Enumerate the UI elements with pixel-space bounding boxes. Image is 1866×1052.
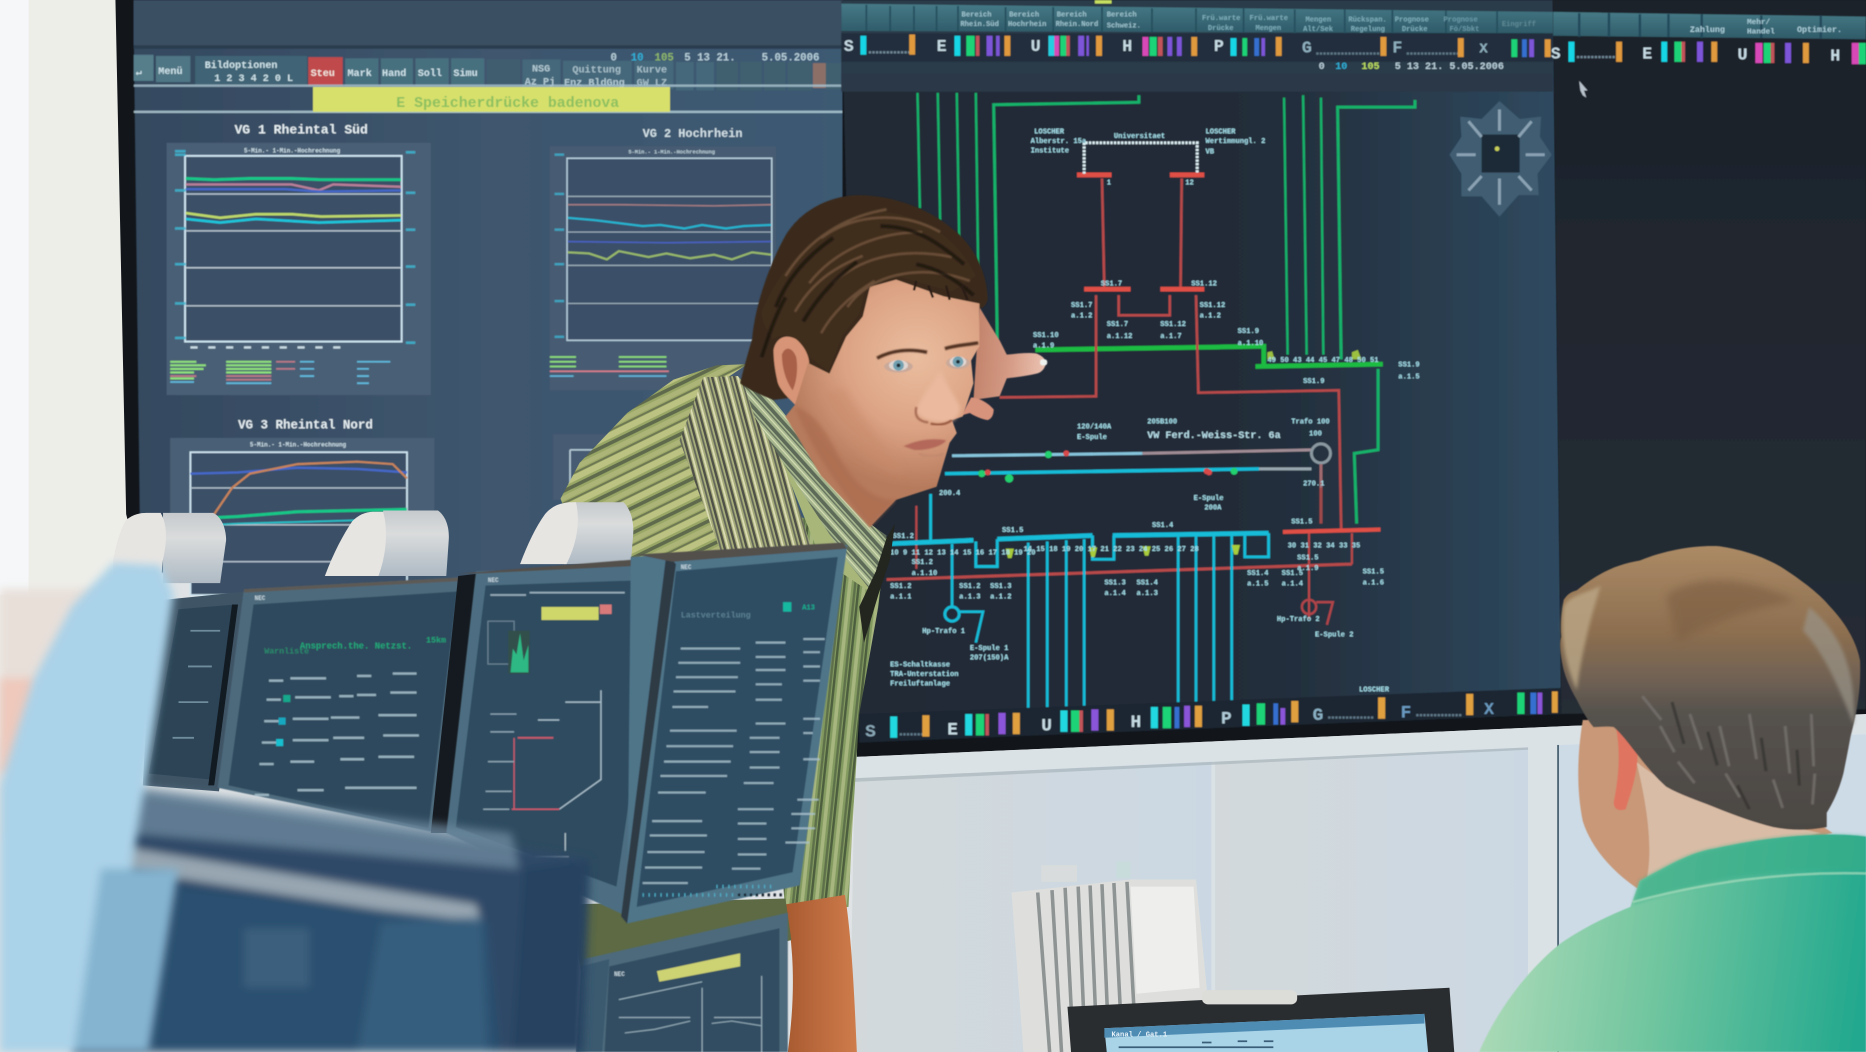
monitor: alarm list	[218, 577, 467, 833]
green polo shirt	[1479, 834, 1866, 1052]
pointing hand	[962, 307, 1047, 420]
diagram labels: Freiluftanlage	[890, 680, 950, 688]
diagram labels: Alberstr. 15a	[1031, 138, 1087, 146]
toolbar: left screen: Bildoptionen	[205, 60, 278, 72]
toolbar: center screen: Prognose	[1444, 16, 1478, 24]
toolbar: center screen: Eingriff	[1502, 21, 1536, 29]
toolbar: center screen: Mengen	[1305, 16, 1331, 24]
chart: VG 2 Hochrhein: 5-Min.- 1-Min.-Hochrechnung	[628, 150, 715, 156]
diagram labels: a.1.6	[1363, 579, 1384, 587]
status clock: center screen: 0	[1319, 62, 1325, 73]
diagram labels: a.1.4	[1282, 581, 1304, 589]
diagram labels: SS1.7	[1101, 281, 1122, 289]
shirt green front	[762, 411, 875, 595]
toolbar: left screen: Menü	[158, 66, 183, 78]
diagram labels: 14 15 18 19 20 17 21 22 23 24 25 26 27 28	[1023, 546, 1199, 554]
diagram labels: SS1.5	[1297, 554, 1319, 562]
chart: fourth chart partly hidden	[553, 434, 607, 500]
toolbar: center screen: Bereich	[1057, 12, 1087, 20]
panel: right video wall screen	[1551, 0, 1866, 714]
monitor: lower chart: NEC	[614, 971, 625, 978]
monitor: text list: NEC	[681, 564, 692, 571]
status strip: right top: H	[1830, 48, 1840, 67]
toolbar: left screen: Az Pj	[525, 76, 555, 88]
panel: left video wall screen	[133, 0, 843, 619]
toolbar: center screen: Rhein.Süd	[960, 21, 999, 29]
foreground blurred light panels	[0, 563, 179, 1052]
diagram labels: a.1.12	[1107, 333, 1132, 341]
toolbar: left screen: Steu	[311, 69, 335, 80]
toolbar: center screen: Prognose	[1395, 16, 1429, 24]
status strip: right top: U	[1737, 47, 1747, 66]
diagram labels: 200.4	[939, 490, 961, 498]
toolbar: center screen: Drücke	[1208, 25, 1234, 33]
status clock: center screen: 5 13 21. 5.05.2006	[1395, 62, 1504, 73]
monitor: lower chart	[576, 913, 788, 1052]
status clock: left screen: 5 13 21.	[684, 53, 736, 65]
diagram labels: SS1.5	[1363, 569, 1384, 577]
diagram labels: LOSCHER	[1034, 128, 1065, 136]
stand 3	[520, 502, 633, 564]
ear	[1614, 728, 1638, 810]
diagram labels: Universitaet	[1114, 133, 1165, 141]
stand 1	[113, 513, 226, 583]
diagram labels: a.1.3	[1136, 590, 1158, 598]
status clock: left screen: 0	[610, 53, 617, 65]
person: seated man in green shirt	[1479, 546, 1866, 1052]
toolbar: center screen: Alt/Sek	[1303, 26, 1334, 34]
toolbar: center screen: Mengen	[1256, 25, 1281, 33]
shirt body stripes	[728, 500, 887, 916]
diagram labels: SS1.5	[1291, 519, 1313, 527]
neck shadow	[795, 407, 896, 527]
monitor: alarm list: Warnliste	[264, 646, 309, 656]
diagram labels: a.1.2	[1200, 313, 1221, 321]
screen bezel	[115, 0, 1866, 757]
shirt collar band	[743, 381, 887, 595]
diagram labels: ES-Schaltkasse	[890, 661, 950, 669]
diagram labels: SS1.3	[990, 583, 1012, 591]
toolbar: left screen: Simu	[453, 68, 478, 80]
eyes	[884, 356, 970, 372]
diagram labels: SS1.2	[959, 583, 981, 591]
monitor: text list	[621, 543, 847, 923]
monitor: schematic	[446, 557, 675, 916]
stand 2	[325, 511, 449, 576]
status strip: center bottom: X	[1484, 701, 1494, 720]
head	[740, 195, 988, 527]
monitor: alarm list: 15km	[426, 636, 446, 646]
diagram labels: a.1.10	[912, 570, 937, 578]
diagram labels: a.1.9	[1033, 342, 1054, 350]
status clock: center screen: 10	[1335, 62, 1347, 73]
dark shirt interior	[859, 524, 895, 643]
toolbar: left screen: Kurve	[637, 66, 667, 77]
toolbar: center screen: Frü.warte	[1250, 15, 1288, 23]
compass navigator	[1449, 101, 1552, 217]
diagram labels: a.1.1	[890, 594, 912, 602]
diagram labels: a.1.5	[1398, 373, 1420, 381]
status clock: left screen: 10	[631, 53, 644, 65]
toolbar: left screen: GW LZ	[637, 79, 667, 90]
status strip: center top: H	[1122, 38, 1132, 57]
diagram labels: SS1.7	[1107, 321, 1128, 329]
chart: VG 1 Rheintal Süd	[167, 122, 431, 395]
toolbar: right screen: Handel	[1747, 28, 1775, 36]
toolbar: left screen: ↵	[136, 68, 142, 79]
alarm bar: Speicherdrücke	[313, 87, 670, 112]
diagram labels: SS1.3	[1104, 579, 1126, 587]
diagram labels: 100	[1309, 431, 1322, 439]
single line diagram: cyan busbars	[887, 450, 1311, 712]
monitor gap	[431, 574, 478, 833]
chart: VG 3 Rheintal Nord: VG 3 Rheintal Nord	[238, 418, 373, 432]
toolbar: right screen: Zahlung	[1690, 25, 1725, 35]
toolbar: center screen: Bereich	[1009, 12, 1039, 20]
bare forearm	[785, 895, 857, 1052]
diagram labels: SS1.2	[890, 583, 912, 591]
diagram labels: 200A	[1204, 504, 1222, 512]
chart: VG 3 Rheintal Nord: 5-Min.- 1-Min.-Hochrechnung	[250, 441, 347, 448]
diagram labels: SS1.4	[1152, 522, 1174, 530]
diagram labels: a.1.3	[959, 594, 981, 602]
shirt back and sleeve	[561, 364, 747, 571]
status strip: center bottom: F	[1401, 704, 1411, 724]
short hair	[1560, 546, 1860, 830]
status strip: center bottom: U	[1041, 717, 1052, 737]
laptop on desk: Kanal / Gat.1	[1112, 1032, 1167, 1040]
cheek shadow	[821, 387, 904, 476]
diagram labels: Wertimmungl. 2	[1206, 138, 1265, 146]
status strip: center top: P	[1214, 38, 1224, 57]
switch markers	[978, 350, 1361, 558]
single line diagram: red switchgear	[887, 175, 1380, 619]
chart: VG 3 Rheintal Nord	[170, 418, 434, 595]
alarm bar: Speicherdrücke: E Speicherdrücke badenova	[396, 96, 619, 112]
diagram labels: 12	[1185, 179, 1194, 187]
status strip: center bottom	[859, 688, 1561, 743]
diagram labels: a.1.4	[1104, 590, 1126, 598]
status strip: center top: G	[1302, 39, 1312, 58]
diagram labels: SS1.4	[1136, 579, 1159, 587]
diagram labels: 207(150)A	[970, 654, 1009, 662]
person: standing man pointing	[561, 195, 1047, 916]
neck and face	[785, 280, 979, 527]
status strip: center bottom: H	[1131, 713, 1141, 733]
status strip: center bottom: S	[865, 723, 876, 743]
diagram labels: SS1.10	[1033, 332, 1059, 340]
status strip: center top: X	[1479, 41, 1488, 57]
diagram labels: E-Spule 1	[970, 645, 1008, 653]
diagram labels: SS1.12	[1160, 321, 1186, 329]
diagram labels: SS1.4	[1247, 570, 1269, 578]
monitor stands	[113, 502, 633, 583]
toolbar: right screen	[1553, 12, 1866, 39]
diagram labels: a.1.7	[1160, 333, 1182, 341]
red transformer 2	[1302, 600, 1333, 625]
panel: center video wall screen	[841, 0, 1561, 743]
monitor: alarm list: NEC	[255, 595, 266, 602]
chart: VG 2 Hochrhein: VG 2 Hochrhein	[643, 127, 743, 141]
toolbar: center screen: Bereich	[962, 12, 991, 20]
single line diagram: green feeders	[918, 93, 1415, 524]
toolbar: right screen: Mehr/	[1747, 19, 1771, 27]
toolbar: center screen: Fö/Sbkt	[1449, 26, 1479, 34]
status strip: center bottom: G	[1313, 706, 1323, 726]
diagram labels: Institute	[1031, 147, 1069, 155]
diagram labels: 205B100	[1147, 419, 1177, 427]
mouth	[903, 439, 946, 450]
toolbar: center screen: Schweiz.	[1107, 22, 1141, 30]
diagram labels: TRA-Unterstation	[890, 671, 959, 679]
toolbar: center screen: Rückspan.	[1348, 16, 1387, 24]
diagram labels: 10 9 11 12 13 14 15 16 17 18 19 20	[890, 550, 1036, 558]
status strip: right top	[1551, 42, 1866, 67]
monitor: alarm list: Ansprech.the. Netzst.	[300, 642, 412, 652]
shirt strip and dark backing under monitors	[571, 898, 791, 988]
status clock: left screen: 105	[655, 53, 674, 65]
status strip: center bottom: E	[947, 720, 958, 740]
toolbar: center screen	[841, 4, 1553, 34]
hair back	[740, 195, 988, 400]
face side and neck	[1578, 720, 1833, 890]
toolbar: left screen: Mark	[347, 68, 372, 80]
diagram labels: SS1.9	[1238, 328, 1259, 336]
binder rack on desk	[1012, 862, 1207, 1052]
nose	[916, 371, 960, 425]
status strip: center top: F	[1392, 39, 1402, 58]
brows	[877, 343, 978, 358]
status strip: center top: E	[937, 38, 947, 57]
diagram labels: a.1.10	[1238, 340, 1263, 348]
toolbar: center screen: Frü.warte	[1202, 15, 1240, 23]
toolbar: center screen: Regelung	[1351, 26, 1385, 34]
laptop on desk	[1067, 988, 1454, 1052]
diagram labels: VB	[1206, 149, 1215, 157]
monitor: far left	[143, 591, 246, 791]
diagram labels: 30 31 32 34 33 35	[1288, 542, 1360, 550]
diagram labels: E-Spule 2	[1315, 632, 1353, 640]
toolbar: left screen: Quittung	[572, 65, 621, 77]
toolbar: center screen: Rhein.Nord	[1056, 21, 1098, 29]
toolbar: center screen: Drücke	[1402, 26, 1428, 34]
toolbar: left screen: 1 2 3 4 2 0 L	[214, 74, 293, 85]
toolbar: left screen: Soll	[418, 68, 442, 80]
foreground blurred monitors	[71, 785, 590, 1052]
shirt placket	[680, 376, 815, 559]
diagram labels: a.1.5	[1247, 581, 1269, 589]
hair top strands	[762, 209, 976, 371]
diagram labels: LOSCHER	[1359, 686, 1390, 694]
diagram labels: VW Ferd.-Weiss-Str. 6a	[1147, 430, 1281, 442]
transformer symbol	[1311, 444, 1330, 524]
toolbar: left screen: NSG	[532, 64, 550, 75]
status strip: right top: E	[1642, 45, 1652, 64]
status clock: center screen	[1319, 62, 1504, 73]
monitor: schematic: NEC	[488, 577, 499, 584]
chart: VG 1 Rheintal Süd: 5-Min.- 1-Min.-Hochrechnung	[244, 147, 341, 154]
chart: VG 1 Rheintal Süd: VG 1 Rheintal Süd	[234, 122, 368, 137]
diagram labels: LOSCHER	[1206, 128, 1236, 136]
diagram labels: SS1.2	[912, 559, 933, 567]
status clock: left screen: 5.05.2006	[762, 53, 819, 65]
diagram labels: SS1.9	[1303, 378, 1324, 386]
status strip: center top: S	[844, 38, 854, 57]
mouse cursor	[1579, 81, 1588, 98]
diagram labels: 270.1	[1303, 481, 1324, 489]
toolbar: center screen: Bereich	[1107, 12, 1137, 20]
toolbar: left screen: Enz BldGng	[564, 78, 625, 90]
diagram labels: SS1.2	[893, 533, 914, 541]
diagram labels: a.1.2	[1071, 313, 1092, 321]
status strip: right top: S	[1551, 45, 1561, 64]
diagram labels: SS1.7	[1071, 302, 1092, 310]
diagram labels: SS1.12	[1200, 302, 1225, 310]
status strip: center top: U	[1031, 38, 1041, 57]
diagram labels: Trafo 100	[1291, 419, 1330, 427]
status strip: center top	[841, 33, 1553, 62]
status clock: center screen: 105	[1361, 62, 1380, 73]
monitor: text list: A13	[802, 604, 815, 612]
diagram labels: E-Spule	[1077, 434, 1107, 442]
diagram labels: Hp-Trafo 1	[922, 628, 965, 636]
diagram labels	[890, 128, 1420, 694]
diagram labels: a.1.9	[1297, 565, 1319, 573]
toolbar: left screen	[133, 55, 841, 90]
diagram labels: SS1.9	[1398, 362, 1420, 370]
toolbar: right screen: Optimier.	[1797, 25, 1842, 35]
single line diagram: dotted coupling	[1084, 143, 1197, 174]
toolbar: left screen: Hand	[382, 68, 406, 80]
chart: VG 2 Hochrhein	[550, 127, 776, 390]
diagram labels: a.1.2	[990, 594, 1012, 602]
diagram labels: E-Spule	[1194, 495, 1224, 503]
toolbar: center screen: Hochrhein	[1008, 21, 1046, 29]
diagram labels: SS1.12	[1191, 281, 1217, 289]
diagram labels: 49 50 43 44 45 47 48 50 51	[1267, 357, 1379, 365]
status strip: center bottom: P	[1221, 710, 1232, 730]
diagram labels: SS1.5	[1282, 570, 1303, 578]
diagram labels: SS1.5	[1002, 527, 1023, 535]
diagram labels: Hp-Trafo 2	[1277, 616, 1320, 624]
ear	[774, 337, 809, 405]
status clock: left screen	[610, 53, 819, 65]
diagram labels: 1	[1107, 179, 1111, 187]
monitor: text list: Lastverteilung	[681, 611, 751, 621]
diagram labels: 120/140A	[1077, 423, 1112, 431]
wall cabinets below the screens	[850, 715, 1866, 1052]
